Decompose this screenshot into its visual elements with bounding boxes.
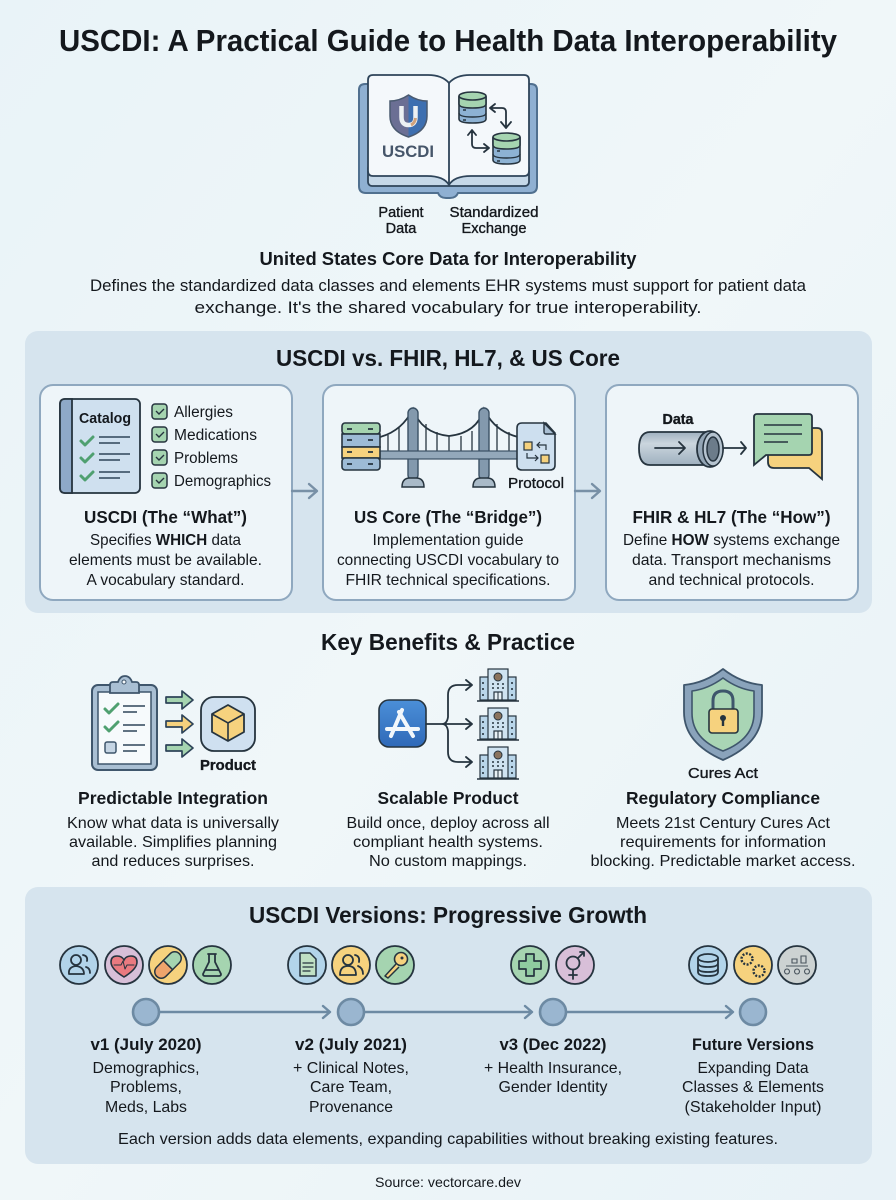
benefit body: Meets 21st Century Cures Act xyxy=(616,815,831,832)
version body: Gender Identity xyxy=(498,1079,608,1096)
icon: database xyxy=(689,946,727,984)
benefit body: requirements for information xyxy=(620,834,826,851)
card title: FHIR & HL7 (The “How”) xyxy=(632,507,830,527)
version body xyxy=(92,1060,200,1116)
version: v2 xyxy=(288,946,414,1116)
icon: health cross xyxy=(511,946,549,984)
label: Patient Data xyxy=(378,205,424,237)
node xyxy=(338,999,364,1025)
checklist: Problems xyxy=(174,450,238,467)
label: Patient Data: Patient xyxy=(378,205,424,221)
node xyxy=(740,999,766,1025)
icon: USCDI shield xyxy=(390,95,427,137)
version body: Problems, xyxy=(110,1079,182,1096)
benefit: Regulatory Compliance xyxy=(590,669,856,870)
benefit body: and reduces surprises. xyxy=(92,853,254,870)
icon: clipboard to product xyxy=(92,676,256,774)
card body: FHIR technical specifications. xyxy=(346,572,550,589)
icon: data pipe xyxy=(639,431,746,467)
source: Source: vectorcare.dev xyxy=(375,1174,521,1190)
icon: flask xyxy=(193,946,231,984)
timeline line and arrows xyxy=(146,1006,733,1018)
card: US Core xyxy=(323,385,575,600)
checklist: Demographics xyxy=(174,473,271,490)
version body: Provenance xyxy=(309,1099,393,1116)
icon: shield with padlock xyxy=(684,669,762,782)
label: Product: Product xyxy=(200,758,256,774)
icon: bridge linking server and protocol xyxy=(342,408,564,492)
version body: + Clinical Notes, xyxy=(293,1060,409,1077)
benefit body xyxy=(590,815,856,870)
version body: Demographics, xyxy=(92,1060,200,1077)
panel: USCDI vs. FHIR, HL7, & US Core xyxy=(25,331,872,613)
version body: Classes & Elements xyxy=(682,1079,824,1096)
intro text: Defines the standardized data classes and elements EHR systems must support for patient data xyxy=(90,277,807,295)
version body: Care Team, xyxy=(310,1079,392,1096)
benefit body xyxy=(67,815,279,870)
panel: USCDI Versions xyxy=(25,887,872,1164)
icon: expanding elements xyxy=(778,946,816,984)
card body: Define HOW systems exchange xyxy=(623,532,840,549)
arrow: USCDI to US Core xyxy=(292,484,317,498)
version body: (Stakeholder Input) xyxy=(684,1099,822,1116)
checklist: Allergies xyxy=(174,404,233,421)
icon: app deployed to hospitals xyxy=(379,669,519,779)
benefit: Predictable Integration xyxy=(67,676,279,870)
version title: v2 (July 2021) xyxy=(295,1035,407,1054)
version: v1 xyxy=(60,946,231,1116)
benefit: Scalable Product xyxy=(346,669,550,870)
card body: Implementation guide xyxy=(372,532,524,549)
node xyxy=(540,999,566,1025)
icon: capsule xyxy=(149,946,187,984)
card title: US Core (The “Bridge”) xyxy=(354,507,542,527)
benefit title: Scalable Product xyxy=(378,788,519,808)
label: Standardized Exchange xyxy=(450,205,538,237)
version body: Meds, Labs xyxy=(105,1099,187,1116)
card body: A vocabulary standard. xyxy=(86,572,244,589)
version: v3 xyxy=(484,946,622,1096)
panel footnote: Each version adds data elements, expanding capabilities without breaking existing features. xyxy=(118,1131,778,1148)
label: Protocol: Protocol xyxy=(508,476,564,492)
benefit body: blocking. Predictable market access. xyxy=(590,853,856,870)
label: Patient Data: Data xyxy=(386,221,417,237)
icon: open book with USCDI shield and databases xyxy=(359,75,537,198)
label: Data: Data xyxy=(662,412,694,428)
checklist xyxy=(152,404,271,490)
heading: USCDI Versions: Progressive Growth xyxy=(249,902,647,928)
label: Cures Act: Cures Act xyxy=(688,766,758,782)
icon: demographics xyxy=(60,946,98,984)
card body: connecting USCDI vocabulary to xyxy=(337,552,559,569)
card body xyxy=(337,532,559,589)
arrow: US Core to FHIR xyxy=(575,484,600,498)
icon: speech bubbles xyxy=(754,414,822,479)
icon: key xyxy=(376,946,414,984)
benefit body: available. Simplifies planning xyxy=(69,834,277,851)
benefit body: Build once, deploy across all xyxy=(346,815,550,832)
heading: USCDI vs. FHIR, HL7, & US Core xyxy=(276,345,620,371)
benefit title: Regulatory Compliance xyxy=(626,788,820,808)
icon: heart xyxy=(105,946,143,984)
icon: catalog book xyxy=(60,399,140,493)
intro text: exchange. It's the shared vocabulary for true interoperability. xyxy=(194,299,702,317)
version title: v1 (July 2020) xyxy=(90,1035,202,1054)
subtitle: United States Core Data for Interoperability xyxy=(260,248,637,269)
card: FHIR and HL7 xyxy=(606,385,858,600)
card body: elements must be available. xyxy=(69,552,262,569)
heading: Key Benefits & Practice: Key Benefits & Practice xyxy=(321,629,575,655)
version body xyxy=(484,1060,622,1096)
title: USCDI: A Practical Guide to Health Data Interoperability xyxy=(59,23,838,58)
card body xyxy=(623,532,840,589)
card body: data. Transport mechanisms xyxy=(632,552,831,569)
version title: Future Versions xyxy=(692,1035,814,1054)
icon: clinical note xyxy=(288,946,326,984)
version: future xyxy=(682,946,824,1116)
node xyxy=(133,999,159,1025)
benefit body xyxy=(346,815,550,870)
version body: + Health Insurance, xyxy=(484,1060,622,1077)
benefit title: Predictable Integration xyxy=(78,788,268,808)
card: USCDI xyxy=(40,385,292,600)
intro text xyxy=(90,277,807,317)
icon: gender symbol xyxy=(556,946,594,984)
card title: USCDI (The “What”) xyxy=(84,507,247,527)
version body xyxy=(293,1060,409,1116)
benefit body: compliant health systems. xyxy=(353,834,543,851)
label: Standardized Exchange: Exchange xyxy=(462,221,526,237)
text: USCDI book label: USCDI xyxy=(382,142,434,161)
version body: Expanding Data xyxy=(698,1060,809,1077)
icon: gears xyxy=(734,946,772,984)
checklist: Medications xyxy=(174,427,257,444)
version title: v3 (Dec 2022) xyxy=(500,1035,606,1054)
card body: Specifies WHICH data xyxy=(90,532,241,549)
label: Standardized Exchange: Standardized xyxy=(450,205,538,221)
benefit body: Know what data is universally xyxy=(67,815,279,832)
icon: catalog book: Catalog xyxy=(79,411,131,427)
icon: care team xyxy=(332,946,370,984)
card body xyxy=(69,532,262,589)
benefit body: No custom mappings. xyxy=(369,853,527,870)
icon: databases with exchange arrows xyxy=(459,92,520,164)
card body: and technical protocols. xyxy=(648,572,814,589)
version body xyxy=(682,1060,824,1116)
